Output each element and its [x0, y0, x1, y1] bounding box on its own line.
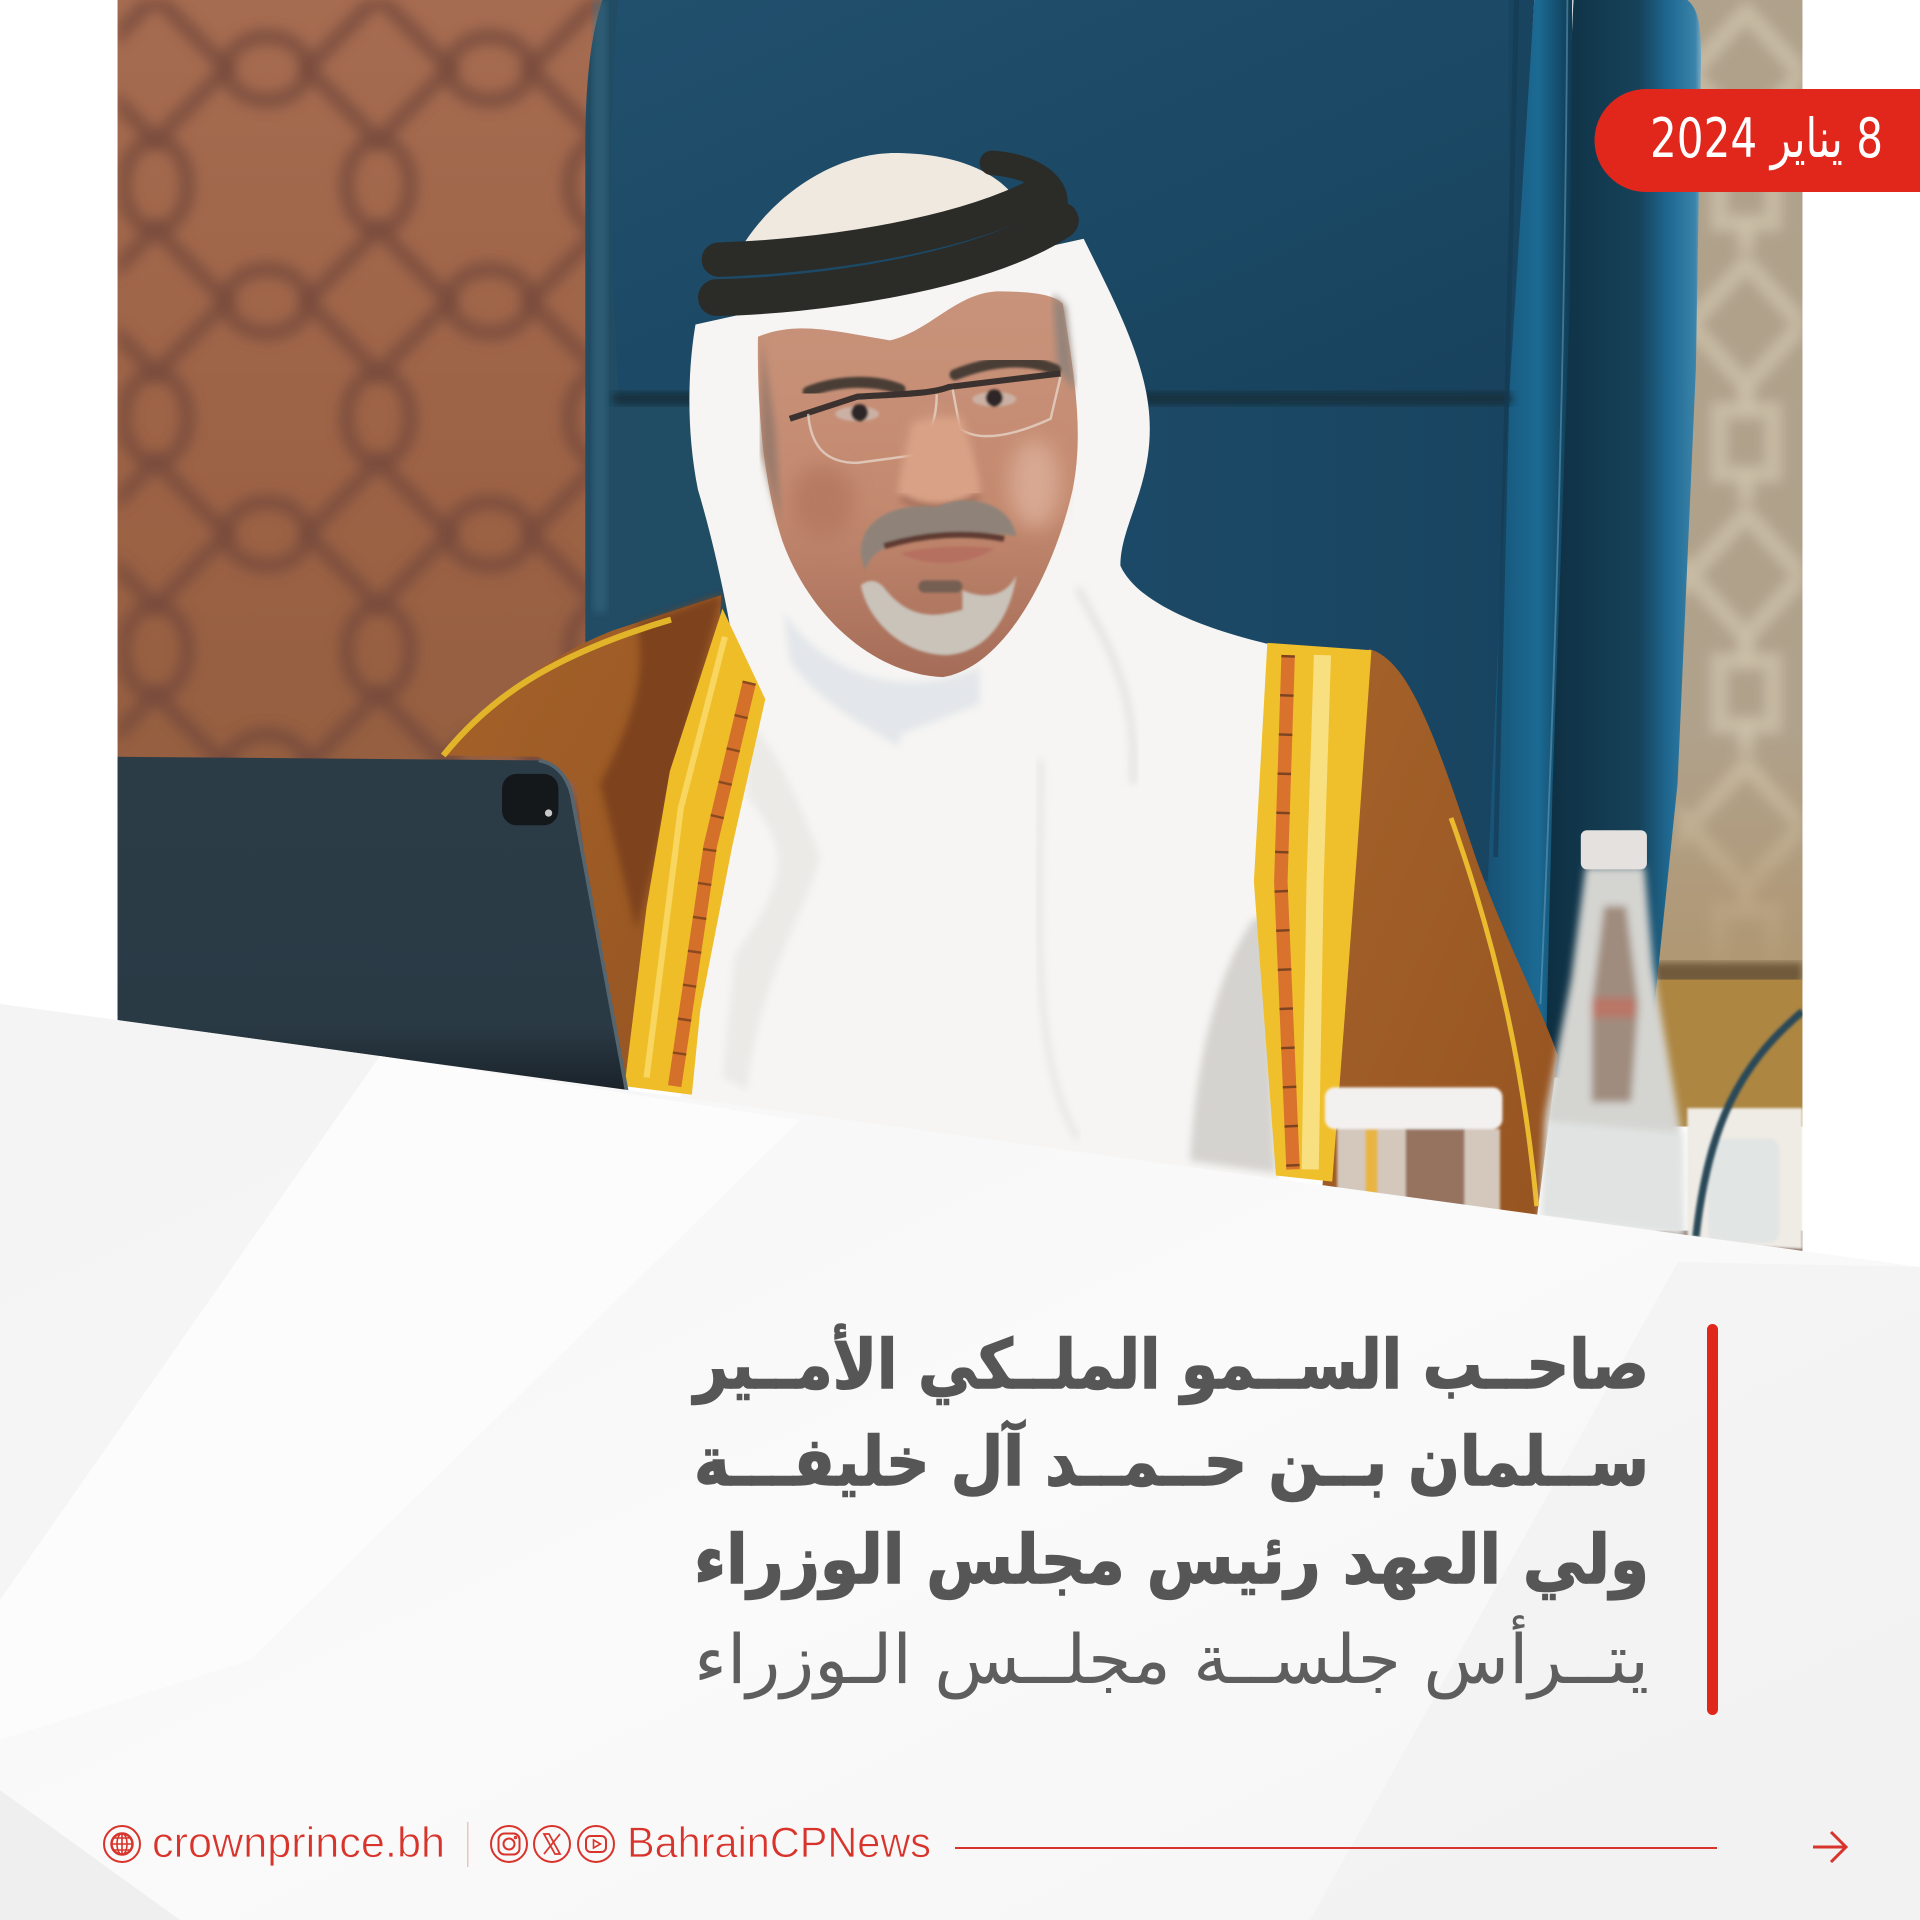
tablet	[118, 757, 627, 1092]
headline text: ســلمان بــن حــمــد آل خليفـــة	[694, 1419, 1649, 1502]
gold embroidered stripe right	[1254, 643, 1371, 1182]
headline text: يتــرأس جلســة مجلــس الـوزراء	[694, 1615, 1649, 1700]
photo: crown prince at cabinet session	[118, 0, 1802, 1280]
right brown robe sleeve	[1322, 649, 1558, 1218]
microphone cable	[1696, 1011, 1802, 1237]
glasses	[790, 373, 1060, 463]
website text: crownprince.bh	[152, 1819, 445, 1867]
eyebrows	[808, 362, 1056, 392]
footer bar	[104, 1819, 1846, 1867]
icon: globe	[104, 1826, 140, 1862]
bottle cap	[1581, 830, 1647, 869]
icon: x	[534, 1826, 570, 1862]
icon: instagram	[491, 1826, 527, 1862]
lattice wall right	[1654, 0, 1802, 1251]
icon: youtube	[578, 1826, 614, 1862]
headline text: ولي العهد رئيس مجلس الوزراء	[694, 1521, 1649, 1600]
arrow	[1813, 1832, 1846, 1862]
white ghutra and thobe	[680, 239, 1280, 1182]
black agal	[716, 163, 1060, 298]
goatee	[861, 576, 1016, 655]
date text: 8 يناير 2024	[1650, 107, 1883, 170]
headline block	[691, 1323, 1718, 1715]
face	[758, 291, 1078, 677]
wood lattice wall left	[118, 0, 632, 1016]
white cup	[1687, 1108, 1802, 1249]
gold embroidered stripe left	[624, 609, 765, 1095]
headline text: صاحــب الســمو الملــكي الأمــير	[691, 1323, 1649, 1405]
social handle text: BahrainCPNews	[627, 1819, 931, 1867]
eyes	[835, 389, 1016, 421]
nose	[899, 416, 980, 508]
red accent bar	[1707, 1324, 1718, 1715]
date badge	[1594, 89, 1920, 192]
white cap top	[744, 153, 1014, 242]
glass water bottle	[1540, 867, 1685, 1237]
blue leather chair	[585, 0, 1701, 1078]
moustache and mouth	[861, 500, 1016, 571]
left brown robe sleeve	[443, 595, 721, 1095]
headline text	[691, 1323, 1649, 1700]
lower white angled panel	[0, 1004, 1920, 1920]
drinking glass with lid	[1325, 1087, 1502, 1227]
